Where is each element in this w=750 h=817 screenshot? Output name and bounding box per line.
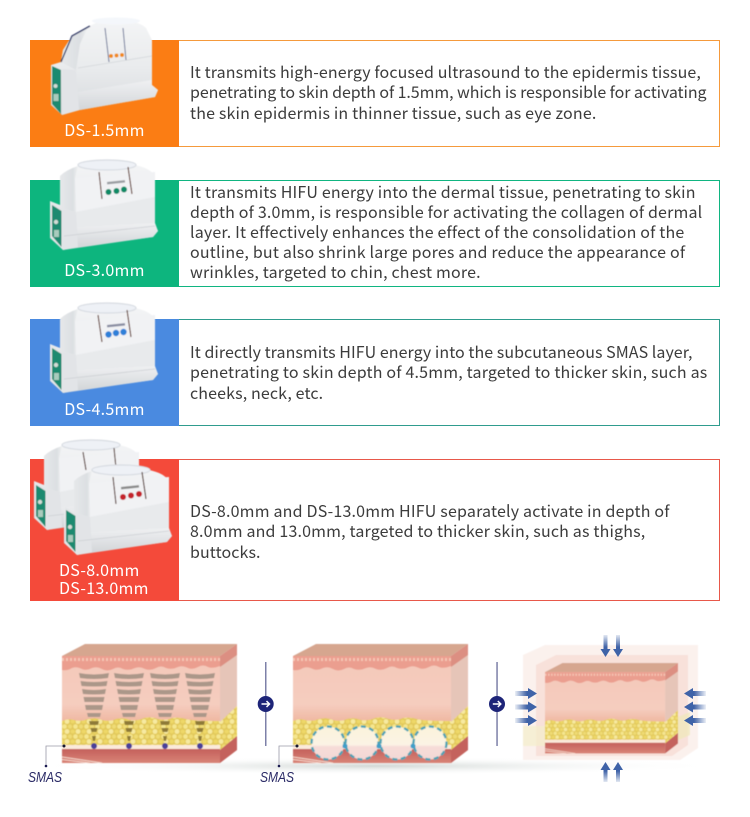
- divider with arrow 1: [258, 662, 274, 746]
- text: DS-4.5mm description: cheeks, neck, etc.: [190, 380, 323, 404]
- ground shadow: [25, 757, 725, 775]
- text: DS-3.0mm description: wrinkles, targeted to chin, chest more.: [190, 259, 481, 283]
- label: DS-8.0mm and DS-13.0mm: [59, 557, 149, 598]
- label: SMAS middle: SMAS: [260, 769, 294, 786]
- text: DS-4.5mm description: It directly transmits HIFU energy into the subcutaneous SMAS layer,: [190, 339, 692, 363]
- panel: DS-3.0mm background: [30, 180, 720, 287]
- text: DS-3.0mm description: [190, 179, 702, 283]
- icon: DS-8.0mm cartridge: [34, 440, 142, 530]
- text: DS-8.0mm and DS-13.0mm description: DS-8.0mm and DS-13.0mm HIFU separately activate in depth of: [190, 498, 670, 522]
- arrows: compression from right: [684, 688, 706, 726]
- arrows: compression from bottom: [600, 762, 623, 782]
- panel: DS-8.0mm and DS-13.0mm background: [30, 459, 720, 601]
- text: DS-3.0mm description: depth of 3.0mm, is responsible for activating the collagen of dermal: [190, 199, 702, 223]
- text: DS-8.0mm and DS-13.0mm description: [190, 498, 670, 563]
- text: DS-1.5mm description: penetrating to skin depth of 1.5mm, which is responsible for activating: [190, 79, 706, 103]
- panel: DS-4.5mm background: [30, 319, 720, 426]
- text: DS-8.0mm and DS-13.0mm description: buttocks.: [190, 539, 261, 563]
- label: SMAS left: SMAS: [28, 769, 62, 786]
- arrows: compression from top: [600, 635, 623, 657]
- icon: DS-1.5mm cartridge: [51, 18, 158, 115]
- diagram: focused ultrasound cones in skin block: [62, 644, 237, 763]
- text: DS-1.5mm description: It transmits high-energy focused ultrasound to the epidermis tissue,: [190, 59, 701, 83]
- arrows: compression from left: [515, 688, 537, 726]
- icon: DS-3.0mm cartridge: [50, 160, 158, 250]
- label: DS-1.5mm: DS-1.5mm: [64, 117, 145, 141]
- text: DS-1.5mm description: [190, 59, 706, 124]
- label: DS-4.5mm: DS-4.5mm: [64, 396, 145, 420]
- label: DS-3.0mm: DS-3.0mm: [64, 257, 145, 281]
- text: DS-3.0mm description: layer. It effectively enhances the effect of the consolidation of the: [190, 219, 684, 243]
- icon: DS-4.5mm cartridge: [50, 303, 158, 393]
- diagram: coagulation zones in skin block: [293, 644, 468, 763]
- label: SMAS middle: [260, 744, 298, 786]
- text: DS-4.5mm description: [190, 339, 707, 404]
- text: DS-1.5mm description: the skin epidermis in thinner tissue, such as eye zone.: [190, 100, 596, 124]
- diagram: tightened skin block with ghost outlines: [523, 645, 698, 760]
- text: DS-3.0mm description: outline, but also shrink large pores and reduce the appearance of: [190, 239, 685, 263]
- label: DS-8.0mm and DS-13.0mm: DS-8.0mm: [59, 557, 140, 581]
- text: DS-4.5mm description: penetrating to skin depth of 4.5mm, targeted to thicker skin, such as: [190, 359, 707, 383]
- divider with arrow 2: [489, 662, 505, 746]
- text: DS-8.0mm and DS-13.0mm description: 8.0mm and 13.0mm, targeted to thicker skin, such as thighs,: [190, 518, 645, 542]
- text: DS-3.0mm description: It transmits HIFU energy into the dermal tissue, penetrating to skin: [190, 179, 696, 203]
- panel: DS-1.5mm background: [30, 40, 720, 147]
- icon: DS-13.0mm cartridge: [64, 465, 172, 555]
- label: DS-8.0mm and DS-13.0mm: DS-13.0mm: [59, 574, 149, 598]
- label: SMAS left: [28, 744, 66, 786]
